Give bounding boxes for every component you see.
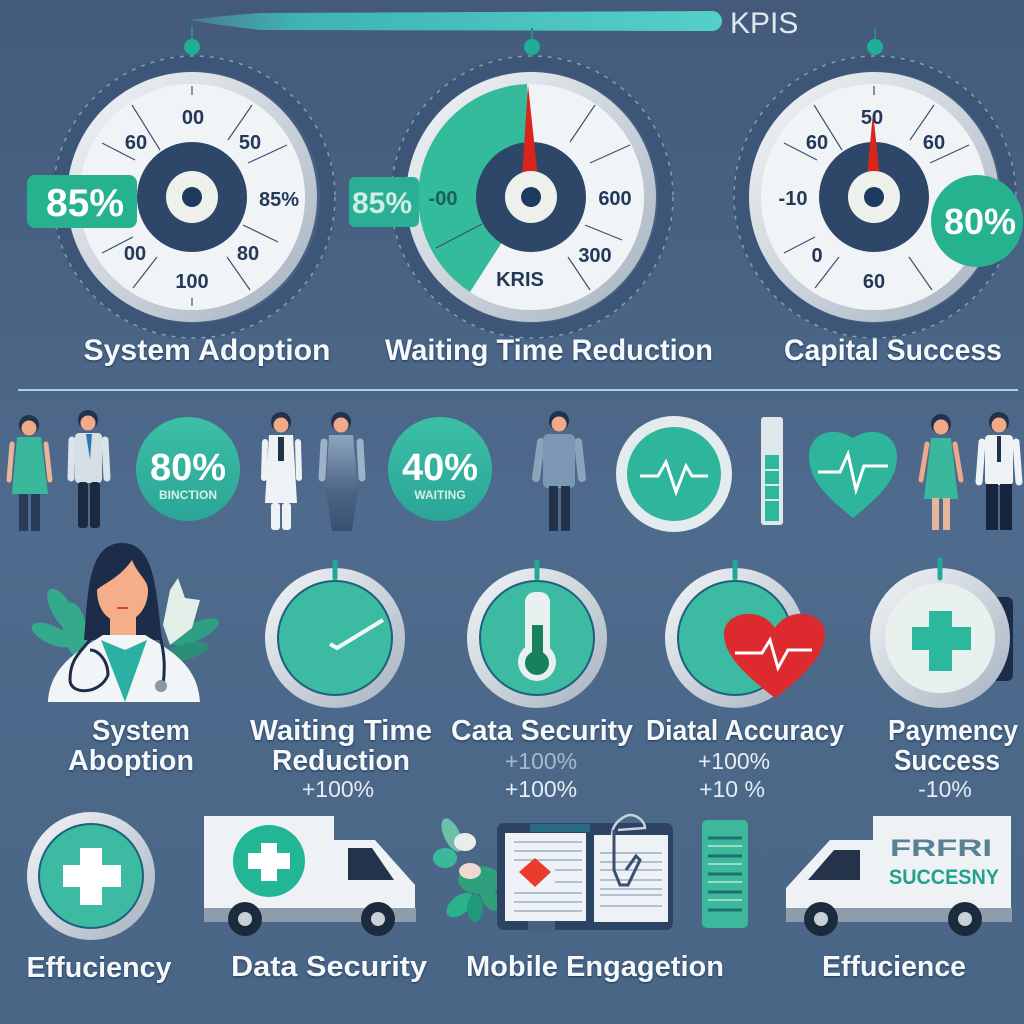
label: data security: Cata Security bbox=[451, 715, 633, 747]
person group 1 bbox=[9, 410, 107, 531]
gauge 3 label: Capital Success bbox=[784, 334, 1002, 367]
icon: plus gauge bbox=[870, 560, 1013, 708]
gauge 3: capital success bbox=[734, 28, 1023, 338]
label: digital accuracy: +100% bbox=[698, 748, 770, 774]
label: data security bbox=[451, 715, 633, 802]
gauge 3: capital success: 60 bbox=[863, 271, 885, 293]
gauge 3: capital success: 0 bbox=[811, 245, 823, 267]
icon: flowers bbox=[433, 815, 504, 922]
gauge 1: system adoption: 60 bbox=[125, 132, 147, 154]
gauge 2: waiting time reduction: 600 bbox=[598, 188, 632, 210]
icon: heart gauge bbox=[665, 562, 825, 708]
label: data security: +100% bbox=[505, 748, 577, 774]
value badge: 85% bbox=[352, 187, 412, 220]
icon: leaves left bbox=[28, 584, 92, 660]
icon: plus gauge small bbox=[27, 812, 155, 940]
label: efficiency: Effuciency bbox=[26, 952, 172, 984]
icon: leaves and flower right bbox=[160, 578, 222, 666]
gauge 1: system adoption: 50 bbox=[239, 132, 261, 154]
label: system adoption: Aboption bbox=[68, 745, 194, 777]
value badge: 80% bbox=[944, 201, 1016, 242]
gauge 1: system adoption: 80 bbox=[237, 243, 259, 265]
label: data security: Data Security bbox=[231, 951, 427, 983]
doctor portrait bbox=[28, 543, 222, 702]
gauge 2: waiting time reduction: -00 bbox=[429, 188, 457, 210]
gauge 2: waiting time reduction: KRIS bbox=[496, 269, 544, 291]
label: efficiency: Effucience bbox=[822, 951, 966, 983]
value badge bbox=[931, 175, 1023, 267]
gauge 1: system adoption: 85% bbox=[259, 189, 299, 211]
gauge 1: system adoption: 100 bbox=[175, 271, 209, 293]
value badge bbox=[27, 175, 137, 228]
icon: delivery truck: SUCCESNY bbox=[889, 866, 999, 889]
divider bbox=[18, 389, 1018, 391]
icon: heartbeat monitor bbox=[616, 416, 732, 532]
icon: delivery truck bbox=[786, 816, 1012, 936]
gauge 2: waiting time reduction bbox=[349, 28, 673, 338]
gauge 3: capital success: 60 bbox=[923, 132, 945, 154]
icon: heart pulse bbox=[809, 432, 897, 518]
icon: thermometer gauge bbox=[467, 562, 607, 708]
label: digital accuracy bbox=[646, 715, 844, 802]
label: waiting time reduction: +100% bbox=[302, 776, 374, 802]
person bbox=[536, 411, 582, 531]
gauge 3: capital success: 50 bbox=[861, 107, 883, 129]
label: mobile engagement: Mobile Engagetion bbox=[466, 951, 724, 983]
icon: server panel bbox=[702, 820, 748, 928]
gauge 1: system adoption bbox=[27, 26, 335, 338]
label: data security: +100% bbox=[505, 776, 577, 802]
gauge 1: system adoption: 00 bbox=[124, 243, 146, 265]
label: digital accuracy: Diatal Accuracy bbox=[646, 715, 844, 747]
label: digital accuracy: +10 % bbox=[699, 776, 765, 802]
badge: 80%: 80% bbox=[150, 447, 226, 489]
label: system adoption: System bbox=[92, 715, 190, 747]
badge: 40%: WAITING bbox=[414, 488, 466, 502]
gauge 1: system adoption: 00 bbox=[182, 107, 204, 129]
header bar bbox=[190, 7, 798, 40]
label: waiting time reduction bbox=[250, 715, 432, 802]
label: system adoption bbox=[68, 715, 194, 777]
badge: 80%: BINCTION bbox=[159, 488, 217, 502]
badge: 40%: 40% bbox=[402, 447, 478, 489]
label: payment success bbox=[888, 715, 1018, 802]
person group 3 bbox=[921, 412, 1019, 530]
badge: 80% bbox=[136, 417, 240, 521]
icon: delivery truck: FRFRI bbox=[890, 835, 992, 862]
label: waiting time reduction: Reduction bbox=[272, 745, 410, 777]
label: payment success: Success bbox=[894, 745, 1000, 777]
icon: clipboard bbox=[497, 815, 673, 932]
icon: level bar bbox=[761, 417, 783, 525]
label: waiting time reduction: Waiting Time bbox=[250, 715, 432, 747]
gauge 3: capital success: 60 bbox=[806, 132, 828, 154]
label: payment success: -10% bbox=[918, 776, 972, 802]
gauge 2 label: Waiting Time Reduction bbox=[385, 334, 713, 367]
gauge 1 label: System Adoption bbox=[84, 334, 330, 367]
value badge bbox=[349, 177, 419, 227]
person group 2 bbox=[264, 412, 362, 531]
icon: check gauge bbox=[265, 562, 405, 708]
gauge 3: capital success: -10 bbox=[779, 188, 807, 210]
header bar: KPIS bbox=[730, 7, 798, 40]
gauge 2: waiting time reduction: 300 bbox=[578, 245, 612, 267]
value badge: 85% bbox=[46, 182, 124, 225]
icon: ambulance van bbox=[204, 816, 416, 936]
badge: 40% bbox=[388, 417, 492, 521]
